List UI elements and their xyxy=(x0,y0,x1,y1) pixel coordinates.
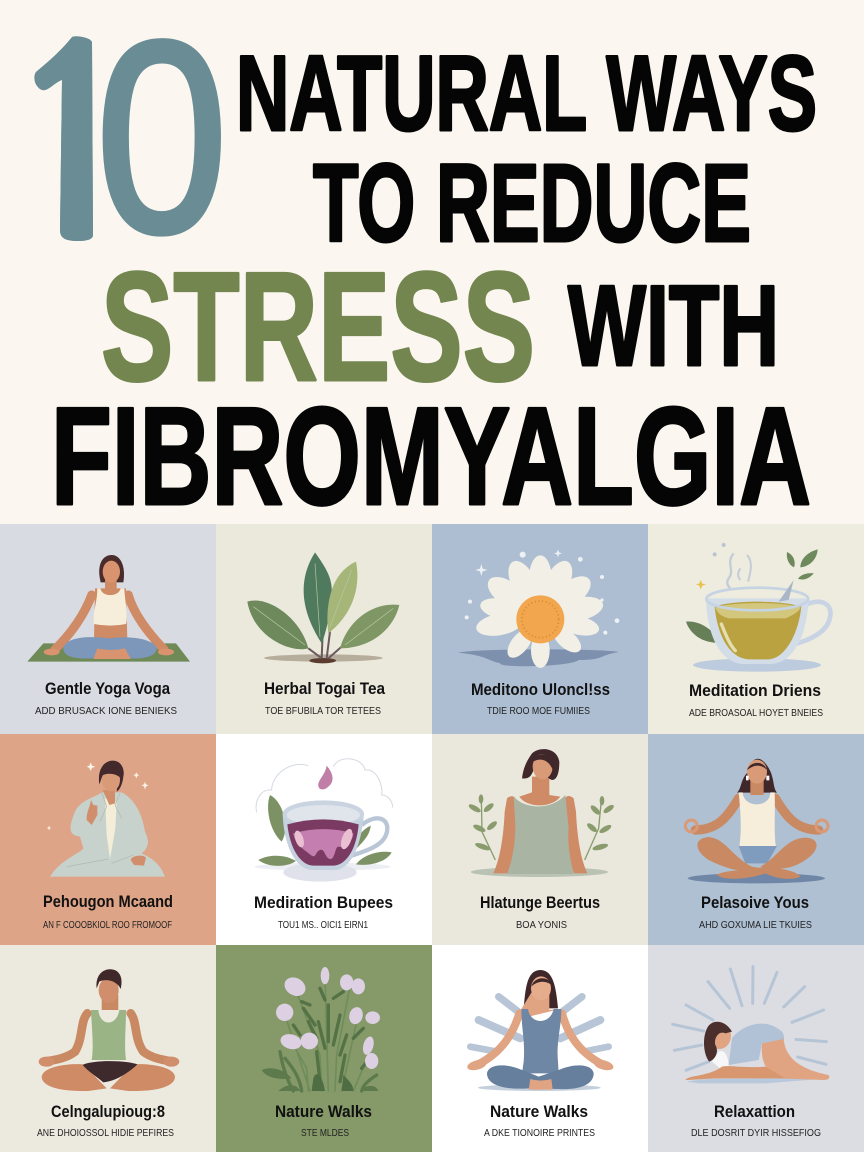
heading: Meditation Driens xyxy=(689,681,821,700)
icon: person in light coat xyxy=(47,761,165,877)
heading: Relaxattion xyxy=(714,1102,795,1121)
heading: Mediration Bupees xyxy=(254,893,393,912)
heading: Celngalupioug:8 xyxy=(51,1102,165,1121)
icon: lavender flowers xyxy=(262,967,380,1091)
subtitle: TDIE ROO MOE FUMIIES xyxy=(487,705,590,717)
panel: berry tea xyxy=(216,734,432,945)
heading: Herbal Togai Tea xyxy=(264,679,385,698)
subtitle: DLE DOSRIT DYIR HISSEFIOG xyxy=(691,1127,821,1139)
title number 10 xyxy=(34,36,221,241)
subtitle: STE MLDES xyxy=(301,1127,349,1139)
icon: daisy flower xyxy=(458,549,619,668)
heading: Pehougon Mcaand xyxy=(43,892,173,911)
icon: seated woman with herb sprigs xyxy=(468,749,615,877)
subtitle: AN F COOOBKIOL ROO FROMOOF xyxy=(43,919,172,931)
panel: relaxing woman xyxy=(648,734,864,945)
panel: mindful person xyxy=(0,734,216,945)
subtitle: TOU1 MS.. OICI1 EIRN1 xyxy=(278,919,368,931)
subtitle: ADE BROASOAL HOYET BNEIES xyxy=(689,707,823,719)
icon: meditating woman with blue petals xyxy=(466,970,615,1091)
panel: breathing practice xyxy=(0,945,216,1152)
heading: Nature Walks xyxy=(490,1102,588,1121)
panel: herbal tea leaves xyxy=(216,524,432,734)
heading: Nature Walks xyxy=(275,1102,372,1121)
icon: herbal leaves xyxy=(247,552,399,663)
subtitle: ADD BRUSACK IONE BENIEKS xyxy=(35,705,177,717)
icon: woman on yoga mat xyxy=(27,555,190,662)
heading: Hlatunge Beertus xyxy=(480,893,600,912)
subtitle: BOA YONIS xyxy=(516,919,567,931)
title word stress: STRESS xyxy=(101,240,535,413)
panel: woman with plants xyxy=(432,734,648,945)
panel: gentle yoga xyxy=(0,524,216,734)
subtitle: AHD GOXUMA LIE TKUIES xyxy=(699,919,812,931)
icon: glass tea cup xyxy=(686,543,830,672)
icon: cross-legged meditating woman xyxy=(685,759,828,883)
panel: nature walks flowers xyxy=(216,945,432,1152)
panel: nature walks meditation xyxy=(432,945,648,1152)
icon: purple tea cup xyxy=(255,759,393,882)
subtitle: A DKE TIONOIRE PRINTES xyxy=(484,1127,595,1139)
subtitle: TOE BFUBILA TOR TETEES xyxy=(265,705,381,717)
heading: Meditono Uloncl!ss xyxy=(471,680,610,699)
panel: relaxation xyxy=(648,945,864,1152)
title word with: WITH xyxy=(568,263,779,390)
title xyxy=(34,36,816,507)
panel: chamomile flower xyxy=(432,524,648,734)
icon: meditating man in green top xyxy=(39,969,179,1091)
icon: woman in child's pose with rays xyxy=(673,967,829,1083)
heading: Pelasoive Yous xyxy=(701,893,809,912)
panel: green tea cup xyxy=(648,524,864,734)
subtitle: ANE DHOIOSSOL HIDIE PEFIRES xyxy=(37,1127,174,1139)
heading: Gentle Yoga Voga xyxy=(45,679,170,698)
